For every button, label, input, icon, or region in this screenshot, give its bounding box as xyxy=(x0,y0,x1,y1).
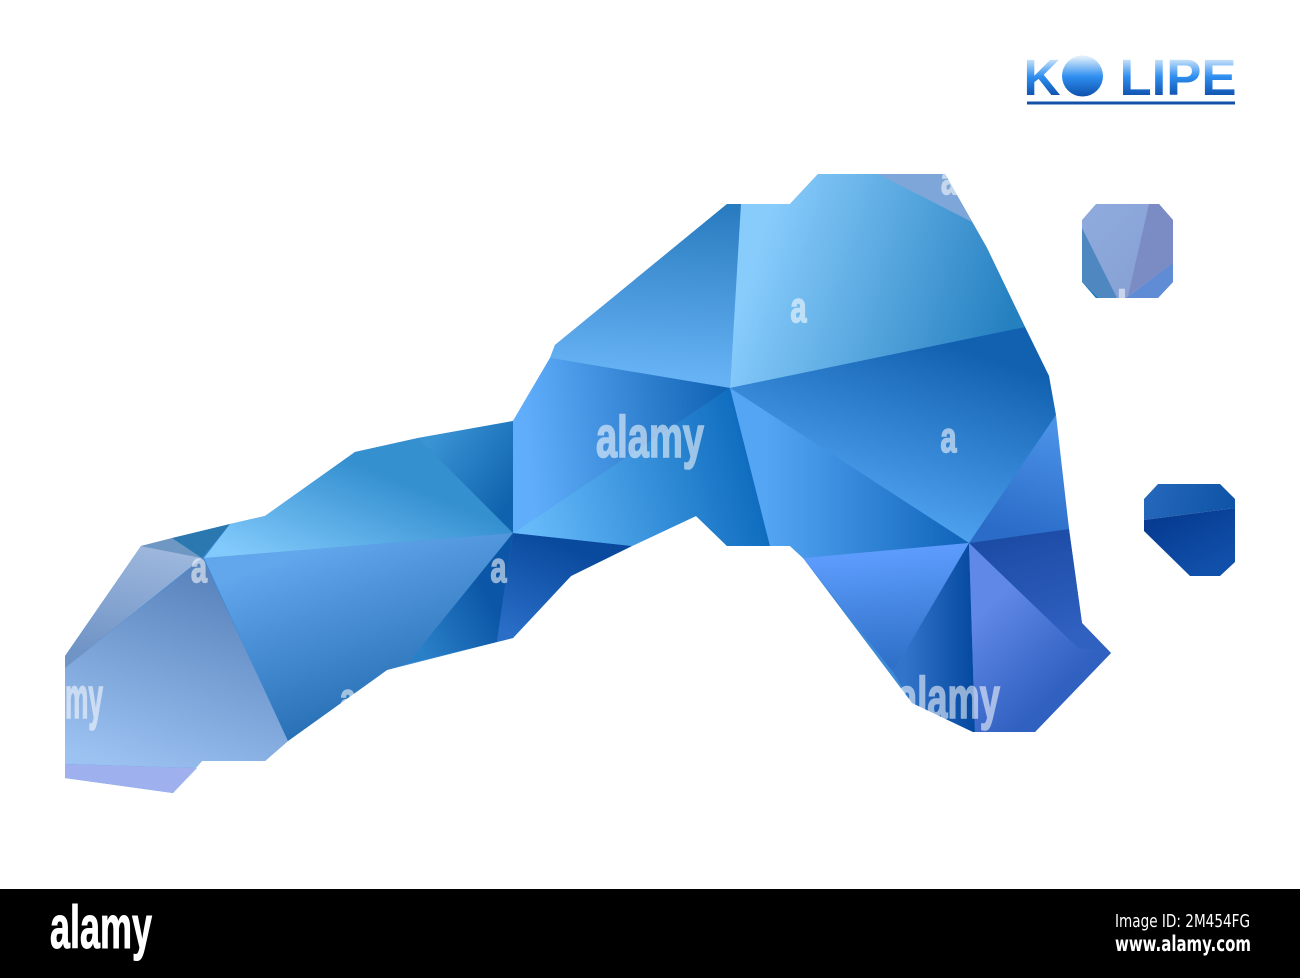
islet main facet xyxy=(1082,204,1173,298)
main island low-poly map xyxy=(65,174,1111,793)
facet: centre lower xyxy=(513,388,770,546)
south-east islet xyxy=(1144,484,1235,576)
watermark a north: a xyxy=(790,284,807,332)
facet: south lobe east xyxy=(969,543,1111,732)
watermark centre: alamy xyxy=(596,405,704,470)
facet: isthmus top xyxy=(418,421,513,533)
watermark a south shore: a xyxy=(340,675,357,723)
islet right-lower facet xyxy=(1126,263,1173,298)
facet: west central top xyxy=(204,438,513,558)
watermark a west: a xyxy=(191,544,208,592)
facet: central east xyxy=(730,388,969,558)
islet left facet xyxy=(1082,228,1117,298)
facet: centre north xyxy=(550,204,741,388)
facet: north large xyxy=(730,174,1025,388)
title letter K: K xyxy=(1024,49,1061,106)
facet: east lower xyxy=(969,529,1111,653)
facet: west sliver xyxy=(141,538,202,558)
footer logo: alamy xyxy=(50,894,152,961)
north-east islet xyxy=(1082,204,1173,298)
title: Ko Lipe xyxy=(1024,49,1236,106)
facet: south shore left xyxy=(407,533,513,664)
title underline xyxy=(1027,102,1235,104)
facet: far west upper xyxy=(65,546,202,668)
facet: west dark tip xyxy=(172,524,230,558)
islet lower facet xyxy=(1144,508,1235,576)
island silhouette base xyxy=(65,174,1111,793)
footer bar xyxy=(0,889,1300,978)
islet purple right facet xyxy=(1128,204,1173,296)
watermarks xyxy=(65,156,1202,731)
facet: east middle xyxy=(730,327,1056,543)
watermark islet: alamy xyxy=(1096,280,1202,345)
watermark south lobe: alamy xyxy=(897,666,1000,731)
islet dark corner xyxy=(1084,284,1098,298)
facet: centre upper xyxy=(513,358,730,533)
facet: south lobe west xyxy=(803,543,969,672)
watermark a west-centre: a xyxy=(490,544,507,592)
title word LIPE: LIPE xyxy=(1120,49,1236,106)
islet upper facet xyxy=(1144,484,1235,520)
watermarks: my xyxy=(65,666,103,731)
facet: west central large xyxy=(204,533,513,741)
facet: south shore right xyxy=(497,533,632,642)
facet: north tip xyxy=(878,174,972,222)
facet: far west large xyxy=(65,558,288,768)
footer image id: Image ID: 2M454FG xyxy=(1115,911,1250,932)
watermark a east: a xyxy=(940,414,957,462)
facet: east edge xyxy=(969,415,1069,543)
facet: south lobe dark xyxy=(893,543,975,732)
watermark a north tip: a xyxy=(941,156,958,204)
facet: south-west lilac band xyxy=(65,764,197,793)
title letter O as circle xyxy=(1062,56,1103,96)
